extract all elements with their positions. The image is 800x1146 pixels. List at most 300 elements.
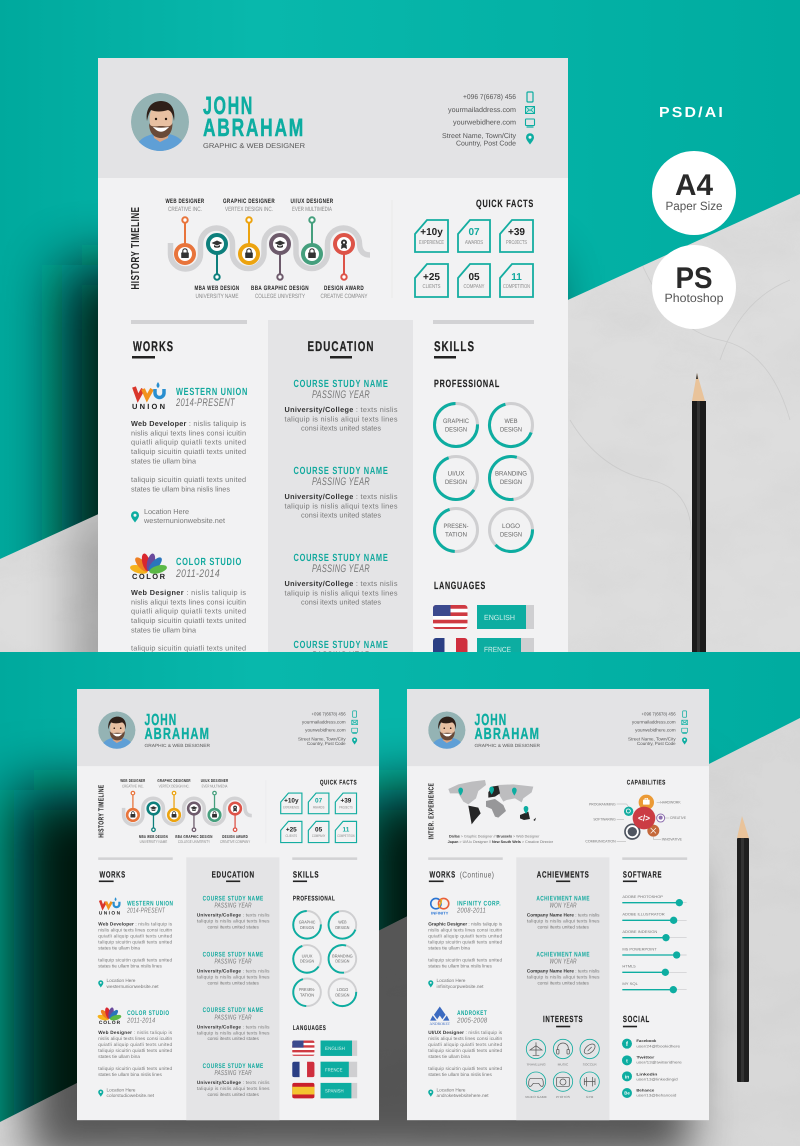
- skill ring labels: DESIGN: [300, 960, 314, 964]
- work entry: infinity corp: nislis aliqui texts lines consi icuitin: [428, 927, 502, 933]
- work entry: infinity corp: states tie ullam bina: [428, 945, 471, 951]
- work entry: androket: quiatli aliquip quiatli texts united: [428, 1042, 502, 1047]
- work entry: western union: states tie ullam bina nislis lines: [98, 963, 162, 969]
- work entry: color studio: nislis aliqui texts lines consi icuitin: [98, 1036, 172, 1041]
- work entry: western union: nislis aliqui texts lines consi icuitin: [131, 428, 246, 437]
- work entry: western union: states tie ullam bina: [98, 945, 141, 951]
- contact details: Street Name, Town/City: [298, 737, 346, 742]
- heading: social: [623, 1014, 650, 1027]
- contact details: [628, 711, 687, 747]
- education entry 1: [284, 379, 398, 433]
- work entry: androket: states tie ullam bina: [428, 1054, 471, 1059]
- education entry 3: [197, 1007, 270, 1042]
- work entry: color studio: taliquip sicuitin quiatli texts united: [98, 1066, 172, 1071]
- shadows of bottom resumes on teal: [0, 742, 407, 1122]
- heading: achievements: [537, 869, 589, 882]
- portrait: [98, 711, 135, 751]
- work entry: western union: Web Developer : nislis taliquip is: [98, 921, 172, 927]
- work entry: infinity corp: [428, 900, 502, 989]
- work entry: androket: Location Here: [437, 1087, 465, 1093]
- heading: works: WORKS: [99, 869, 126, 879]
- skill ring labels: BRANDING: [495, 471, 527, 478]
- quick facts values: 11: [511, 272, 522, 283]
- shadow of top resume on teal: [16, 220, 586, 552]
- heading: quick facts: QUICK FACTS: [476, 198, 534, 210]
- education entry 1: University/College : texts nislis: [197, 912, 270, 918]
- heading: interests: [543, 1014, 583, 1027]
- skill ring labels: LOGO: [502, 523, 520, 530]
- timeline labels: EVER MULTIMEDIA: [202, 784, 228, 789]
- education entry 3: PASSING YEAR: [312, 563, 370, 575]
- name: [474, 711, 540, 743]
- heading: works: WORKS: [133, 338, 174, 354]
- skill ring labels: DESIGN: [335, 926, 350, 930]
- timeline labels: CREATIVE INC.: [168, 206, 202, 213]
- work entry: color studio: states tie ullam bina: [98, 1054, 141, 1059]
- work entry: western union: Location Here: [144, 507, 189, 516]
- education entry 2: PASSING YEAR: [215, 958, 252, 965]
- work entry: color studio: Location Here: [107, 1087, 135, 1093]
- software sliders: ADOBE ILLUSTRATOR: [622, 912, 665, 916]
- education entry 1: consi itexts united states: [301, 424, 381, 433]
- work entry: infinity corp: INFINITY CORP.: [457, 900, 501, 907]
- work entry: western union: westernunionwebsite.net: [106, 983, 159, 989]
- education entry 4: consi itexts united states: [207, 1092, 259, 1097]
- work entry: androket: taliquip sicuitin quiatli texts united: [428, 1048, 502, 1053]
- heading: languages: LANGUAGES: [434, 580, 486, 592]
- contact details: +096 7(6678) 456: [463, 93, 516, 101]
- education entry 2: COURSE STUDY NAME: [203, 951, 264, 958]
- quick facts values: AWARDS: [465, 240, 483, 246]
- heading: education: [308, 341, 373, 358]
- work entry: western union: 2014-PRESENT: [175, 397, 236, 409]
- timeline labels: DESIGN AWARD: [222, 835, 248, 839]
- skill ring labels: GRAPHIC: [443, 418, 469, 425]
- logo: androket: ANDROKET: [429, 1023, 450, 1026]
- work entry: infinity corp: quiatli aliquip quiatli texts united: [428, 933, 502, 939]
- heading: inter. experience: INTER. EXPERIENCE: [428, 783, 435, 839]
- education entry 2: University/College : texts nislis: [197, 968, 270, 974]
- heading: software: SOFTWARE: [623, 869, 662, 879]
- work entry: androket: androketwebsitehere.net: [437, 1093, 489, 1098]
- background: marble of bottom sheet: [0, 710, 800, 1146]
- education entry 2: consi itexts united states: [207, 980, 259, 986]
- contact details: Country, Post Code: [637, 741, 676, 747]
- timeline labels: COLLEGE UNIVERSITY: [255, 293, 305, 300]
- education column background: [186, 857, 279, 1120]
- education entry 3: [284, 553, 398, 607]
- quick facts boxes: [281, 793, 357, 843]
- work entry: western union: Location Here: [107, 978, 135, 983]
- timeline labels: WEB DESIGNER: [120, 779, 145, 783]
- social links: user/13@behanceid: [636, 1094, 676, 1098]
- skill ring labels: DESIGN: [500, 479, 522, 486]
- work entry: color studio: 2011-2014: [175, 568, 220, 580]
- name: [144, 711, 210, 743]
- software sliders: ADOBE INDESIGN: [622, 930, 657, 934]
- timeline labels: UI/UX DESIGNER: [290, 198, 334, 205]
- quick facts values: COMPETITION: [503, 284, 530, 290]
- education entry 4: taliquip is nislis aliqui texts lines: [197, 1086, 270, 1091]
- education entry 4: COURSE STUDY NAME: [294, 640, 388, 651]
- map legend: [448, 835, 553, 844]
- skill ring labels: BRANDING: [332, 954, 353, 959]
- heading: works: [99, 869, 126, 882]
- skill ring labels: LOGO: [337, 988, 348, 992]
- interest labels: [525, 1063, 597, 1099]
- skill rings: [288, 907, 360, 1007]
- work entry: western union: nislis aliqui texts lines consi icuitin: [98, 927, 172, 933]
- achievement entry 2: WON YEAR: [549, 958, 577, 965]
- education column background: [268, 320, 413, 652]
- education entry 3: University/College : texts nislis: [197, 1024, 270, 1030]
- resume: top large page: [98, 58, 568, 662]
- name: ABRAHAM: [474, 725, 540, 743]
- education entry 2: [197, 951, 270, 986]
- skill ring labels: GRAPHIC: [299, 920, 316, 925]
- education entry 2: taliquip is nislis aliqui texts lines: [284, 501, 398, 510]
- timeline labels: CREATIVE COMPANY: [320, 293, 368, 300]
- logo: infinity corp: [431, 898, 449, 916]
- quick facts values: COMPANY: [464, 284, 485, 290]
- page background: [98, 178, 568, 652]
- heading: education: EDUCATION: [308, 338, 374, 354]
- band: teal field of bottom sheet: [0, 652, 800, 1146]
- page background: [77, 689, 379, 1120]
- education entry 1: PASSING YEAR: [312, 389, 370, 401]
- work entry: color studio: [131, 557, 246, 652]
- social links: Behance: [636, 1089, 654, 1093]
- language: english: [433, 605, 534, 629]
- heading: history timeline: HISTORY TIMELINE: [98, 784, 105, 838]
- work entry: color studio: Web Designer : nislis taliquip is: [98, 1030, 172, 1035]
- work entry: western union: [98, 900, 173, 989]
- achievement entry 2: consi itexts united states: [537, 980, 589, 986]
- timeline labels: [120, 779, 250, 845]
- work entry: western union: states tie ullam bina nislis lines: [131, 484, 230, 493]
- capabilities labels: COMMUNICATION: [585, 839, 616, 843]
- social links: [622, 1039, 682, 1098]
- logo: color studio: [97, 1007, 122, 1025]
- contact details: +096 7(6678) 456: [642, 711, 676, 717]
- contact details: yourwebidhere.com: [305, 728, 346, 733]
- language: french: FRENCE: [325, 1067, 342, 1073]
- achievement entry 1: [527, 895, 600, 930]
- timeline labels: GRAPHIC DESIGNER: [223, 198, 275, 205]
- pencil: top: [692, 373, 706, 652]
- quick facts values: +39: [340, 798, 352, 805]
- timeline labels: MBA WEB DESIGN: [194, 285, 240, 292]
- logo: western union: UNION: [132, 402, 165, 411]
- timeline labels: BBA GRAPHIC DESIGN: [251, 285, 309, 292]
- quick facts values: +10y: [284, 798, 299, 805]
- logo: western union: [132, 382, 165, 411]
- social links: Linkedin: [636, 1072, 657, 1076]
- work entry: androket: ANDROKET: [457, 1010, 487, 1017]
- logo: color studio: COLOR: [132, 572, 166, 581]
- achievement entry 1: WON YEAR: [549, 902, 577, 909]
- logo: color studio: COLOR: [99, 1019, 120, 1025]
- skill ring labels: UI/UX: [448, 471, 465, 478]
- work entry: infinity corp: taliquip sicuitin quiatli texts united: [428, 939, 502, 945]
- skill ring labels: DESIGN: [500, 532, 522, 539]
- contact details: Country, Post Code: [456, 140, 516, 148]
- heading: software: [623, 869, 662, 882]
- interest labels: SOCCER: [583, 1063, 597, 1066]
- quick facts values: COMPANY: [312, 834, 325, 838]
- social links: in: [625, 1074, 629, 1080]
- education entry 4: COURSE STUDY NAME: [203, 1063, 264, 1070]
- header band: [407, 689, 709, 766]
- badge: A4 paper size: [652, 151, 736, 235]
- achievements column background: [516, 857, 609, 1120]
- logo: infinity corp: INFINITY: [431, 911, 448, 916]
- badge: PS photoshop: PS: [676, 262, 712, 295]
- social links: Twitter: [636, 1056, 655, 1060]
- quick facts values: CLIENTS: [422, 284, 441, 290]
- quick facts values: EXPERIENCE: [419, 240, 444, 246]
- work entry: western union: taliquip sicuitin quiatli texts united: [131, 475, 246, 484]
- capabilities labels: INNOVATIVE: [662, 838, 682, 842]
- badge: A4 paper size: Paper Size: [666, 199, 723, 213]
- quick facts values: 07: [468, 227, 480, 238]
- education entry 1: [197, 895, 270, 930]
- language: english: [292, 1041, 357, 1056]
- education entry 1: PASSING YEAR: [215, 902, 252, 909]
- heading: works continue: [429, 869, 494, 882]
- heading: skills: SKILLS: [434, 338, 475, 354]
- software sliders: HTML5: [622, 965, 636, 969]
- timeline labels: UI/UX DESIGNER: [201, 779, 228, 783]
- quick facts values: 05: [315, 827, 322, 834]
- language: spanish: [292, 1083, 357, 1098]
- work entry: infinity corp: taliquip sicuitin quiatli texts united: [428, 957, 502, 963]
- work entry: color studio: taliquip sicuitin quiatli texts united: [131, 644, 246, 652]
- timeline chart: [124, 791, 252, 831]
- education entry 3: consi itexts united states: [207, 1036, 259, 1042]
- skill ring labels: WEB: [338, 920, 347, 925]
- education entry 1: COURSE STUDY NAME: [203, 895, 264, 902]
- quick facts values: 05: [468, 272, 480, 283]
- timeline chart: [170, 217, 370, 280]
- logo: color studio: [130, 554, 167, 580]
- capabilities labels: CREATIVE: [670, 816, 686, 820]
- heading: achievements: ACHIEVMENTS: [537, 869, 589, 879]
- timeline labels: VERTEX DESIGN INC.: [159, 784, 190, 789]
- capabilities labels: PROGRAMMING: [589, 802, 616, 806]
- heading: languages: LANGUAGES: [293, 1024, 326, 1032]
- heading: works continue: (Continue): [460, 870, 494, 879]
- quick facts values: +39: [508, 227, 525, 238]
- badge: A4 paper size: A4: [675, 169, 713, 202]
- work entry: androket: [428, 1010, 502, 1098]
- work entry: western union: quiatli aliquip quiatli texts united: [131, 438, 246, 447]
- timeline labels: GRAPHIC DESIGNER: [157, 779, 191, 783]
- work entry: color studio: 2011-2014: [127, 1017, 155, 1024]
- achievement entry 2: Company Name Here : texts nislis: [527, 968, 600, 974]
- software sliders: [622, 895, 687, 993]
- badge: PS photoshop: Photoshop: [664, 291, 724, 305]
- timeline labels: [166, 198, 368, 300]
- capabilities labels: HARDWORK: [660, 801, 681, 805]
- name: [203, 96, 302, 136]
- work entry: color studio: nislis aliqui texts lines consi icuitin: [131, 597, 246, 606]
- education entry 2: COURSE STUDY NAME: [294, 466, 388, 477]
- timeline labels: VERTEX DESIGN INC.: [225, 206, 273, 213]
- work entry: color studio: COLOR STUDIO: [127, 1010, 170, 1017]
- skill ring labels: PRESEN-: [299, 988, 315, 992]
- achievement entry 1: Company Name Here : texts nislis: [527, 912, 600, 918]
- education entry 3: PASSING YEAR: [215, 1014, 252, 1021]
- badge: PS photoshop: [652, 245, 736, 329]
- language: french: FRENCE: [484, 645, 511, 654]
- work entry: infinity corp: Graphic Designer : nislis taliquip is: [428, 921, 502, 927]
- social links: t: [626, 1058, 628, 1064]
- job title: GRAPHIC & WEB DESIGNER: [144, 744, 210, 748]
- timeline labels: CREATIVE COMPANY: [220, 840, 250, 845]
- language: french: [292, 1062, 357, 1077]
- contact details: yourmailaddress.com: [302, 720, 346, 725]
- heading: education: [212, 869, 255, 882]
- work entry: western union: WESTERN UNION: [127, 900, 173, 907]
- work entry: western union: states tie ullam bina: [131, 456, 197, 465]
- quick facts values: EXPERIENCE: [283, 806, 299, 810]
- background: marble of top sheet: [0, 194, 800, 652]
- language: english: ENGLISH: [484, 613, 515, 622]
- language: english: ENGLISH: [325, 1046, 345, 1051]
- skill ring labels: WEB: [504, 418, 518, 425]
- education entry 4: PASSING YEAR: [215, 1069, 252, 1077]
- education entry 1: taliquip is nislis aliqui texts lines: [284, 414, 398, 423]
- interest labels: GYM: [586, 1095, 593, 1099]
- quick facts values: +25: [286, 827, 297, 834]
- page background: [407, 689, 709, 1120]
- heading: professional: PROFESSIONAL: [293, 895, 335, 902]
- achievement entry 1: ACHIEVMENT NAME: [536, 895, 590, 902]
- software sliders: MS POWERPOINT: [622, 947, 657, 951]
- education entry 1: taliquip is nislis aliqui texts lines: [197, 918, 270, 924]
- education entry 3: taliquip is nislis aliqui texts lines: [284, 588, 398, 597]
- work entry: color studio: states tie ullam bina: [131, 625, 197, 634]
- logo: androket: [429, 1006, 450, 1026]
- contact details: yourwebidhere.com: [453, 118, 516, 126]
- world map: [448, 780, 536, 824]
- capabilities labels: SOFTWARING: [593, 818, 616, 822]
- skill ring labels: [443, 418, 527, 539]
- education entry 2: University/College : texts nislis: [284, 492, 398, 501]
- contact details: Country, Post Code: [307, 741, 346, 747]
- work entry: color studio: COLOR STUDIO: [176, 557, 242, 568]
- quick facts boxes: [415, 220, 533, 297]
- work entry: color studio: quiatli aliquip quiatli texts united: [131, 607, 246, 616]
- quick facts values: CLIENTS: [286, 834, 297, 838]
- achievement entry 2: ACHIEVMENT NAME: [536, 951, 590, 958]
- job title: GRAPHIC & WEB DESIGNER: [203, 143, 305, 150]
- contact details: [442, 92, 534, 148]
- map legend: Japan > UI/Ux Designer // New South Wels > Creative Director: [448, 840, 553, 844]
- quick facts values: AWARDS: [313, 806, 325, 810]
- label: PSD/AI: PSD/AI: [659, 105, 725, 121]
- skill ring labels: [299, 920, 353, 998]
- work entry: western union: westernunionwebsite.net: [143, 516, 225, 525]
- work entry: western union: Web Developer : nislis taliquip is: [131, 419, 246, 428]
- social links: user/13@linkedingid: [636, 1077, 678, 1081]
- work entry: infinity corp: states tie ullam bina nislis lines: [428, 963, 492, 969]
- work entry: color studio: Web Designer : nislis taliquip is: [131, 588, 246, 597]
- software sliders: ADOBE PHOTOSHOP: [622, 895, 663, 899]
- work entry: color studio: colorstudiowebsite.net: [107, 1093, 154, 1098]
- interest labels: PHOTOS: [556, 1095, 570, 1099]
- heading: skills: SKILLS: [293, 869, 319, 879]
- skill rings: [432, 402, 534, 553]
- contact details: yourmailaddress.com: [632, 720, 676, 725]
- social links: f: [626, 1041, 628, 1048]
- contact details: Street Name, Town/City: [628, 737, 676, 742]
- work entry: western union: [131, 387, 248, 525]
- logo: western union: [99, 897, 120, 916]
- contact details: +096 7(6678) 456: [312, 711, 346, 717]
- education entry 2: taliquip is nislis aliqui texts lines: [197, 974, 270, 980]
- quick facts values: +25: [423, 272, 440, 283]
- timeline labels: BBA GRAPHIC DESIGN: [175, 835, 213, 839]
- social links: user/24@fbookidhere: [636, 1044, 680, 1048]
- education entry 2: consi itexts united states: [301, 511, 381, 520]
- achievement entry 1: taliquip is nislis aliqui texts lines: [527, 918, 600, 924]
- capabilities labels: [585, 801, 686, 843]
- education entry 2: PASSING YEAR: [312, 476, 370, 488]
- timeline labels: CREATIVE INC.: [122, 784, 144, 789]
- skill ring labels: TATION: [445, 532, 467, 539]
- capabilities diagram: </>: [638, 813, 650, 823]
- work entry: western union: taliquip sicuitin quiatli texts united: [98, 939, 172, 945]
- skill ring labels: DESIGN: [445, 426, 467, 434]
- language: spanish: SPANISH: [325, 1088, 344, 1094]
- work entry: western union: WESTERN UNION: [176, 387, 248, 398]
- education entry 4: PASSING YEAR: [312, 650, 370, 662]
- heading: works continue: WORKS: [429, 869, 456, 879]
- heading: education: EDUCATION: [212, 869, 255, 879]
- heading: skills: [293, 869, 319, 882]
- timeline labels: MBA WEB DESIGN: [139, 835, 168, 839]
- achievement entry 2: [527, 951, 600, 986]
- skill ring labels: DESIGN: [445, 479, 467, 486]
- heading: social: SOCIAL: [623, 1014, 650, 1024]
- timeline labels: UNIVERSITY NAME: [196, 293, 238, 300]
- work entry: androket: taliquip sicuitin quiatli texts united: [428, 1066, 502, 1071]
- quick facts values: +10y: [420, 227, 443, 238]
- work entry: color studio: states tie ullam bina nislis lines: [98, 1072, 162, 1077]
- education entry 3: University/College : texts nislis: [284, 579, 398, 588]
- logo: western union: UNION: [99, 910, 120, 916]
- timeline labels: DESIGN AWARD: [324, 285, 364, 292]
- quick facts values: 11: [343, 827, 350, 834]
- achievement entry 1: consi itexts united states: [537, 924, 589, 930]
- interest labels: VIDEO GAME: [525, 1095, 547, 1099]
- skill ring labels: DESIGN: [335, 993, 350, 998]
- name: JOHN: [144, 711, 177, 729]
- quick facts values: PROJECTS: [339, 806, 353, 810]
- interest icons: [526, 1039, 599, 1091]
- capabilities diagram: [617, 795, 669, 841]
- skill ring labels: TATION: [300, 993, 314, 998]
- education entry 4: [294, 640, 388, 652]
- job title: GRAPHIC & WEB DESIGNER: [474, 744, 540, 748]
- name: ABRAHAM: [144, 725, 210, 743]
- contact details: yourwebidhere.com: [635, 728, 676, 733]
- heading: skills: [434, 341, 474, 358]
- work entry: color studio: taliquip sicuitin quiatli texts united: [98, 1048, 172, 1053]
- work entry: androket: nislis aliqui texts lines consi icuitin: [428, 1036, 502, 1041]
